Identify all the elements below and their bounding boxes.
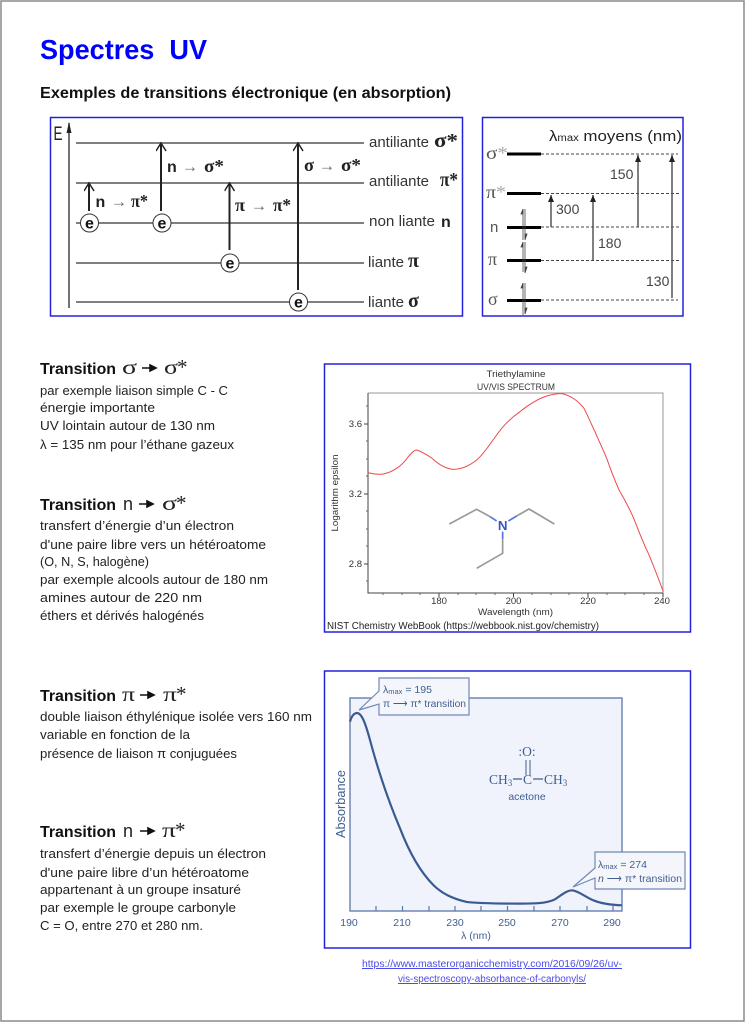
heading: Transition <box>40 497 116 514</box>
molecule: acetone: 3 <box>508 778 513 788</box>
plot area <box>350 698 622 911</box>
level labels: σ <box>408 290 419 312</box>
axis labels: 3.6 <box>349 419 362 430</box>
molecule: acetone: acetone <box>508 791 546 803</box>
level labels: antiliante <box>369 173 429 190</box>
axis labels: 3.2 <box>349 489 362 500</box>
dashed levels <box>541 154 680 300</box>
level labels: π* <box>440 169 458 191</box>
description: appartenant à un groupe insaturé <box>40 883 241 897</box>
energy levels <box>76 143 364 302</box>
transition arrows <box>89 143 298 290</box>
title: Spectres UV <box>40 34 207 65</box>
description: amines autour de 220 nm <box>40 591 202 605</box>
electrons: e <box>85 216 94 232</box>
callout: lambda max 195: = 195 <box>402 684 432 696</box>
energy axis <box>54 122 72 308</box>
electrons: e <box>226 256 235 272</box>
description: λ = 135 nm pour l’éthane gazeux <box>40 438 235 452</box>
axis labels: 240 <box>654 596 670 607</box>
axis labels: 270 <box>551 917 569 929</box>
wavelength values: 300 <box>556 201 580 217</box>
callout: lambda max 195 <box>359 678 469 715</box>
callout: lambda max 195: max <box>388 687 403 696</box>
electrons: e <box>294 294 303 312</box>
arrows <box>551 155 672 298</box>
source link <box>362 959 622 985</box>
axis labels: 2.8 <box>349 559 362 570</box>
transition labels: π* <box>131 191 148 211</box>
axis labels <box>330 419 670 618</box>
description: UV lointain autour de 130 nm <box>40 419 215 433</box>
description: éthers et dérivés halogénés <box>40 609 204 623</box>
description: par exemple liaison simple C - C <box>40 384 228 398</box>
spectrum curve <box>368 394 663 592</box>
heading: Transition <box>40 361 116 378</box>
level labels: liante <box>368 294 404 311</box>
transition labels: π* <box>273 195 291 215</box>
transition labels: n <box>96 194 105 211</box>
axis labels: Wavelength (nm) <box>478 607 553 618</box>
electron spin pairs <box>521 209 527 315</box>
description: d'une paire libre vers un hétéroatome <box>40 538 266 552</box>
heading: σ <box>162 491 177 515</box>
description: transfert d’énergie d’un électron <box>40 519 234 533</box>
description: variable en fonction de la <box>40 728 190 742</box>
panel title: λmax moyens (nm) <box>549 128 682 145</box>
molecule: acetone: CH <box>489 772 508 787</box>
heading <box>40 491 186 515</box>
wavelength values: 130 <box>646 273 670 289</box>
description: double liaison éthylénique isolée vers 160 nm <box>40 710 312 724</box>
level labels: π* <box>486 182 506 202</box>
panel: acetone spectrum <box>324 671 690 948</box>
orbital bars <box>507 154 541 300</box>
level labels: n <box>441 214 451 231</box>
heading: π <box>162 818 177 842</box>
text block: sigma to sigma star <box>40 355 235 452</box>
plot frame and ticks <box>364 393 663 597</box>
molecule: triethylamine <box>449 509 554 568</box>
transition labels: → <box>251 196 267 215</box>
transition labels: n <box>167 159 177 176</box>
heading: σ <box>164 355 178 379</box>
transition labels: σ* <box>204 156 224 176</box>
level labels: σ* <box>434 130 458 152</box>
transition labels: → <box>319 156 335 175</box>
electrons: e <box>158 216 167 232</box>
level labels: liante <box>368 254 404 271</box>
molecule: triethylamine: N <box>498 518 507 533</box>
level labels <box>368 130 458 312</box>
heading: * <box>175 818 186 842</box>
source note: NIST Chemistry WebBook (https://webbook.nist.gov/chemistry) <box>327 621 599 632</box>
axis ticks <box>376 906 613 911</box>
source link: https://www.masterorganicchemistry.com/2016/09/26/uv- <box>362 959 622 970</box>
molecule: acetone: :O: <box>518 744 536 759</box>
level labels: π <box>408 250 419 272</box>
molecule: acetone: 3 <box>563 778 568 788</box>
description <box>40 710 312 761</box>
callout: lambda max 274: = 274 <box>617 859 647 871</box>
molecule: acetone: C <box>523 772 532 787</box>
heading: σ <box>122 355 137 379</box>
level labels: non liante <box>369 213 435 230</box>
level labels: n <box>490 219 498 236</box>
axis labels: λ (nm) <box>461 930 491 942</box>
transition labels: σ* <box>341 155 361 175</box>
transition labels: → <box>111 192 127 211</box>
chart title: UV/VIS SPECTRUM <box>477 382 555 393</box>
callout: lambda max 274 <box>573 852 685 889</box>
callout: lambda max 195: λ <box>383 684 388 696</box>
heading: * <box>176 491 186 515</box>
heading <box>40 682 186 706</box>
molecule: acetone: CH <box>544 772 563 787</box>
molecule: acetone <box>489 744 568 803</box>
axis labels: 180 <box>431 596 447 607</box>
transition labels: π <box>235 195 245 215</box>
description: énergie importante <box>40 401 155 415</box>
heading <box>40 818 186 842</box>
level labels: π <box>488 249 497 269</box>
description: (O, N, S, halogène) <box>40 555 149 569</box>
axis labels: 250 <box>498 917 516 929</box>
description <box>40 847 266 933</box>
text block: pi to pi star <box>40 682 312 761</box>
wavelength values: 150 <box>610 166 634 182</box>
callout: lambda max 274: max <box>603 862 618 871</box>
electrons <box>80 214 308 312</box>
description <box>40 519 268 623</box>
axis labels: 230 <box>446 917 464 929</box>
wavelength values: 180 <box>598 235 622 251</box>
heading: * <box>176 682 186 706</box>
callout: lambda max 274: λ <box>598 859 603 871</box>
absorbance curve <box>350 713 622 905</box>
heading: π <box>122 682 135 706</box>
transition labels: σ <box>304 155 314 175</box>
axis labels: 190 <box>340 917 358 929</box>
description: C = O, entre 270 et 280 nm. <box>40 919 203 933</box>
callout: lambda max 195: π ⟶ π* transition <box>383 698 466 710</box>
text block: n to pi star <box>40 818 266 933</box>
description: par exemple le groupe carbonyle <box>40 901 236 915</box>
energy axis: E <box>54 124 62 145</box>
heading: n <box>123 821 133 841</box>
heading <box>40 355 188 379</box>
axis labels: 220 <box>580 596 596 607</box>
description: d'une paire libre d’un hétéroatome <box>40 866 249 880</box>
wavelength values <box>556 166 670 289</box>
heading: π <box>163 682 178 706</box>
axis labels: 290 <box>603 917 621 929</box>
axis labels: 200 <box>506 596 521 607</box>
chart title: Triethylamine <box>486 369 546 380</box>
transition labels: → <box>182 157 198 176</box>
callout: lambda max 274: n ⟶ π* transition <box>598 873 682 885</box>
heading: Transition <box>40 688 116 705</box>
panel: average lambda max diagram <box>482 118 683 316</box>
heading: Transition <box>40 824 116 841</box>
text block: n to sigma star <box>40 491 268 623</box>
level labels <box>486 143 508 309</box>
description <box>40 384 235 452</box>
subtitle: Exemples de transitions électronique (en absorption) <box>40 85 451 102</box>
source link: vis-spectroscopy-absorbance-of-carbonyls/ <box>398 974 586 985</box>
heading: * <box>177 355 188 379</box>
level labels: antiliante <box>369 134 429 151</box>
panel: energy level diagram <box>50 118 462 316</box>
description: par exemple alcools autour de 180 nm <box>40 573 268 587</box>
level labels: σ* <box>486 143 508 163</box>
axis labels <box>334 770 621 942</box>
axis labels: 210 <box>393 917 411 929</box>
panel: triethylamine spectrum <box>324 364 690 632</box>
transition labels <box>96 155 361 215</box>
description: présence de liaison π conjuguées <box>40 747 237 761</box>
axis labels: Absorbance <box>334 770 348 838</box>
description: transfert d’énergie depuis un électron <box>40 847 266 861</box>
chart title <box>477 369 555 393</box>
heading: n <box>123 494 133 514</box>
axis labels: Logarithm epsilon <box>330 454 341 532</box>
level labels: σ <box>488 289 498 309</box>
